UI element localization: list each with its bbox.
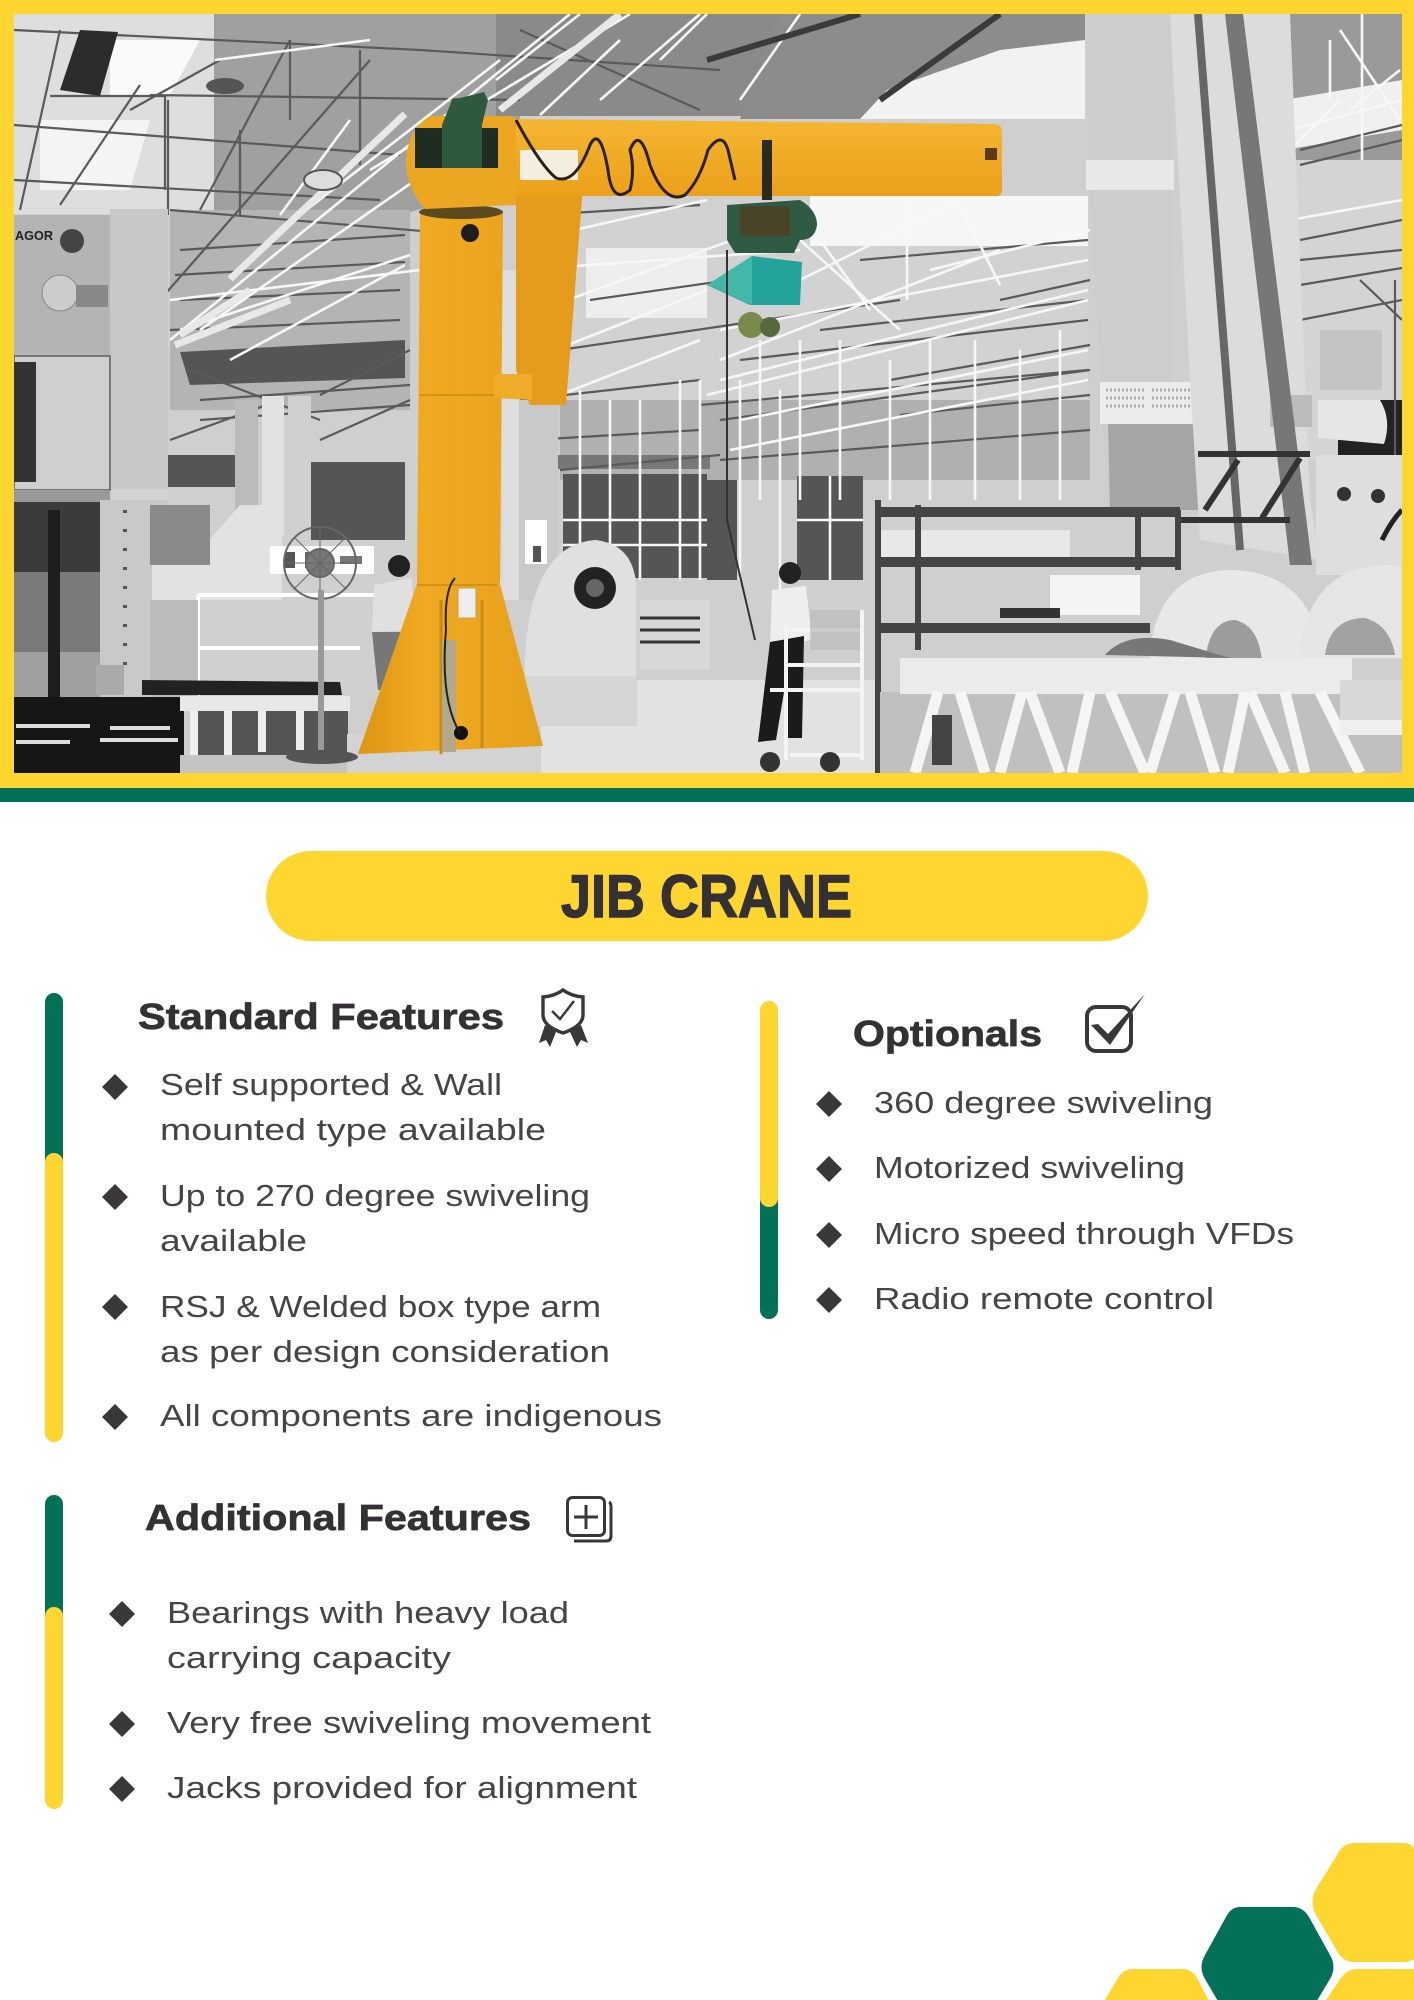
panel: additional features xyxy=(45,1495,651,1809)
hoist sign box xyxy=(707,256,802,305)
centre-left console area xyxy=(150,505,408,700)
bullet: mounting: Self supported & Wall xyxy=(160,1067,502,1102)
icon: stacked plus xyxy=(568,1498,611,1541)
bullet: micro speed: Micro speed through VFDs xyxy=(874,1216,1294,1251)
metal rack shelving xyxy=(878,500,1180,773)
white trestle table xyxy=(880,658,1402,773)
floor xyxy=(286,680,876,773)
nameplate xyxy=(520,150,578,180)
bullet: swivel range xyxy=(102,1178,590,1258)
green motor xyxy=(442,92,488,168)
panel: optionals xyxy=(760,994,1294,1319)
bottom-left workbench xyxy=(14,680,350,773)
heading: additional features: Additional Features xyxy=(145,1497,531,1538)
festoon cable xyxy=(516,120,735,197)
title pill xyxy=(266,851,1148,941)
bracket strut xyxy=(516,186,583,405)
vertical dark pipes xyxy=(1198,14,1312,565)
distant columns xyxy=(235,270,558,600)
bullet: components: All components are indigenous xyxy=(160,1398,662,1433)
accent bar xyxy=(45,1495,63,1809)
roof panels xyxy=(14,14,1402,480)
green band under photo xyxy=(0,788,1414,802)
worker with trolley xyxy=(758,562,862,772)
bullet: free swiveling: Very free swiveling movement xyxy=(167,1705,651,1740)
bullet: arm type xyxy=(102,1289,610,1369)
photo frame: yellow border xyxy=(0,0,1414,788)
heavy white beams xyxy=(175,14,620,345)
bullet: bearings xyxy=(109,1595,569,1675)
heading: optionals: Optionals xyxy=(853,1013,1042,1054)
crane pillar xyxy=(358,212,543,754)
right side machine and duct xyxy=(1316,330,1402,575)
title text: JIB CRANE xyxy=(561,863,852,930)
icon: award shield xyxy=(539,990,588,1047)
overhead lamp fixture xyxy=(60,30,118,96)
accent bar xyxy=(760,1001,778,1319)
bullet: swivel range: available xyxy=(160,1223,307,1258)
panel: standard features xyxy=(45,990,662,1442)
steel bracket under pipes xyxy=(1180,454,1310,520)
machine brand text: AGOR xyxy=(15,228,54,243)
bullet: jacks: Jacks provided for alignment xyxy=(167,1770,637,1805)
bullet: arm type: as per design consideration xyxy=(160,1334,610,1369)
bullet: radio remote: Radio remote control xyxy=(874,1281,1214,1316)
bullet: arm type: RSJ & Welded box type arm xyxy=(160,1289,601,1324)
dark lower truss bands and windows xyxy=(167,340,1402,580)
accent bar xyxy=(45,993,63,1442)
bullet: bearings: Bearings with heavy load xyxy=(167,1595,569,1630)
coil decoiler machine xyxy=(525,520,710,726)
crane head housing xyxy=(406,116,516,209)
heading: standard features: Standard Features xyxy=(138,996,504,1037)
bullet: swivel range: Up to 270 degree swiveling xyxy=(160,1178,590,1213)
hoist xyxy=(727,200,817,253)
bullet: mounting: mounted type available xyxy=(160,1112,546,1147)
bullet: bearings: carrying capacity xyxy=(167,1640,452,1675)
roof truss lines: dark xyxy=(14,30,1402,480)
hanging lamps xyxy=(206,78,342,190)
large building column xyxy=(1086,14,1320,560)
icon: checkbox xyxy=(1087,994,1145,1051)
bullet: motorized: Motorized swiveling xyxy=(874,1150,1185,1185)
control box and cable xyxy=(458,588,476,618)
standing fan xyxy=(284,527,356,750)
decorative hexagons corner xyxy=(1103,1843,1414,2000)
left press machine xyxy=(14,209,168,702)
hook block xyxy=(738,312,764,338)
jib crane xyxy=(358,92,1002,754)
bullet: mounting xyxy=(102,1067,546,1147)
worker near crane base xyxy=(372,555,414,690)
roof truss lines: bright xyxy=(170,14,1402,600)
photo: factory floor with jib crane xyxy=(14,14,1402,773)
white steel coils xyxy=(1105,565,1402,660)
jib arm xyxy=(510,119,1002,196)
bullet: 360 swivel: 360 degree swiveling xyxy=(874,1085,1213,1120)
